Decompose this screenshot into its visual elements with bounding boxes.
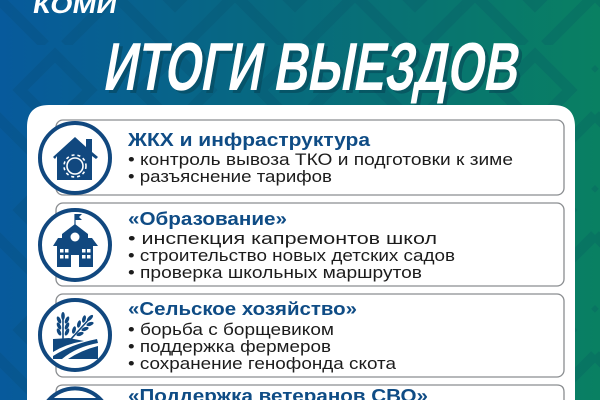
bullets: • разъяснение тарифов [128,167,332,186]
card: education [40,203,564,286]
card: veterans [49,385,564,400]
icon: school [40,210,110,280]
card: housing [40,120,564,195]
icon: house with gear [40,123,110,193]
heading: «Образование» [128,208,287,229]
bullets [128,150,513,186]
bullets: • инспекция капремонтов школ [128,229,437,248]
bullets: • борьба с борщевиком [128,320,334,339]
bullets [128,320,397,373]
heading: «Сельское хозяйство» [128,298,357,319]
white panel [27,105,575,400]
card: agriculture [40,294,564,377]
bullets: • сохранение генофонда скота [128,354,397,373]
bullets [128,229,455,282]
bullets: • строительство новых детских садов [128,246,455,265]
heading: ЖКХ и инфраструктура [127,129,371,150]
icon ring [49,388,101,400]
icon: wheat field [40,300,110,370]
bullets: • контроль вывоза ТКО и подготовки к зиме [128,150,513,169]
bullets: • проверка школьных маршрутов [128,263,422,282]
bullets: • поддержка фермеров [128,337,331,356]
